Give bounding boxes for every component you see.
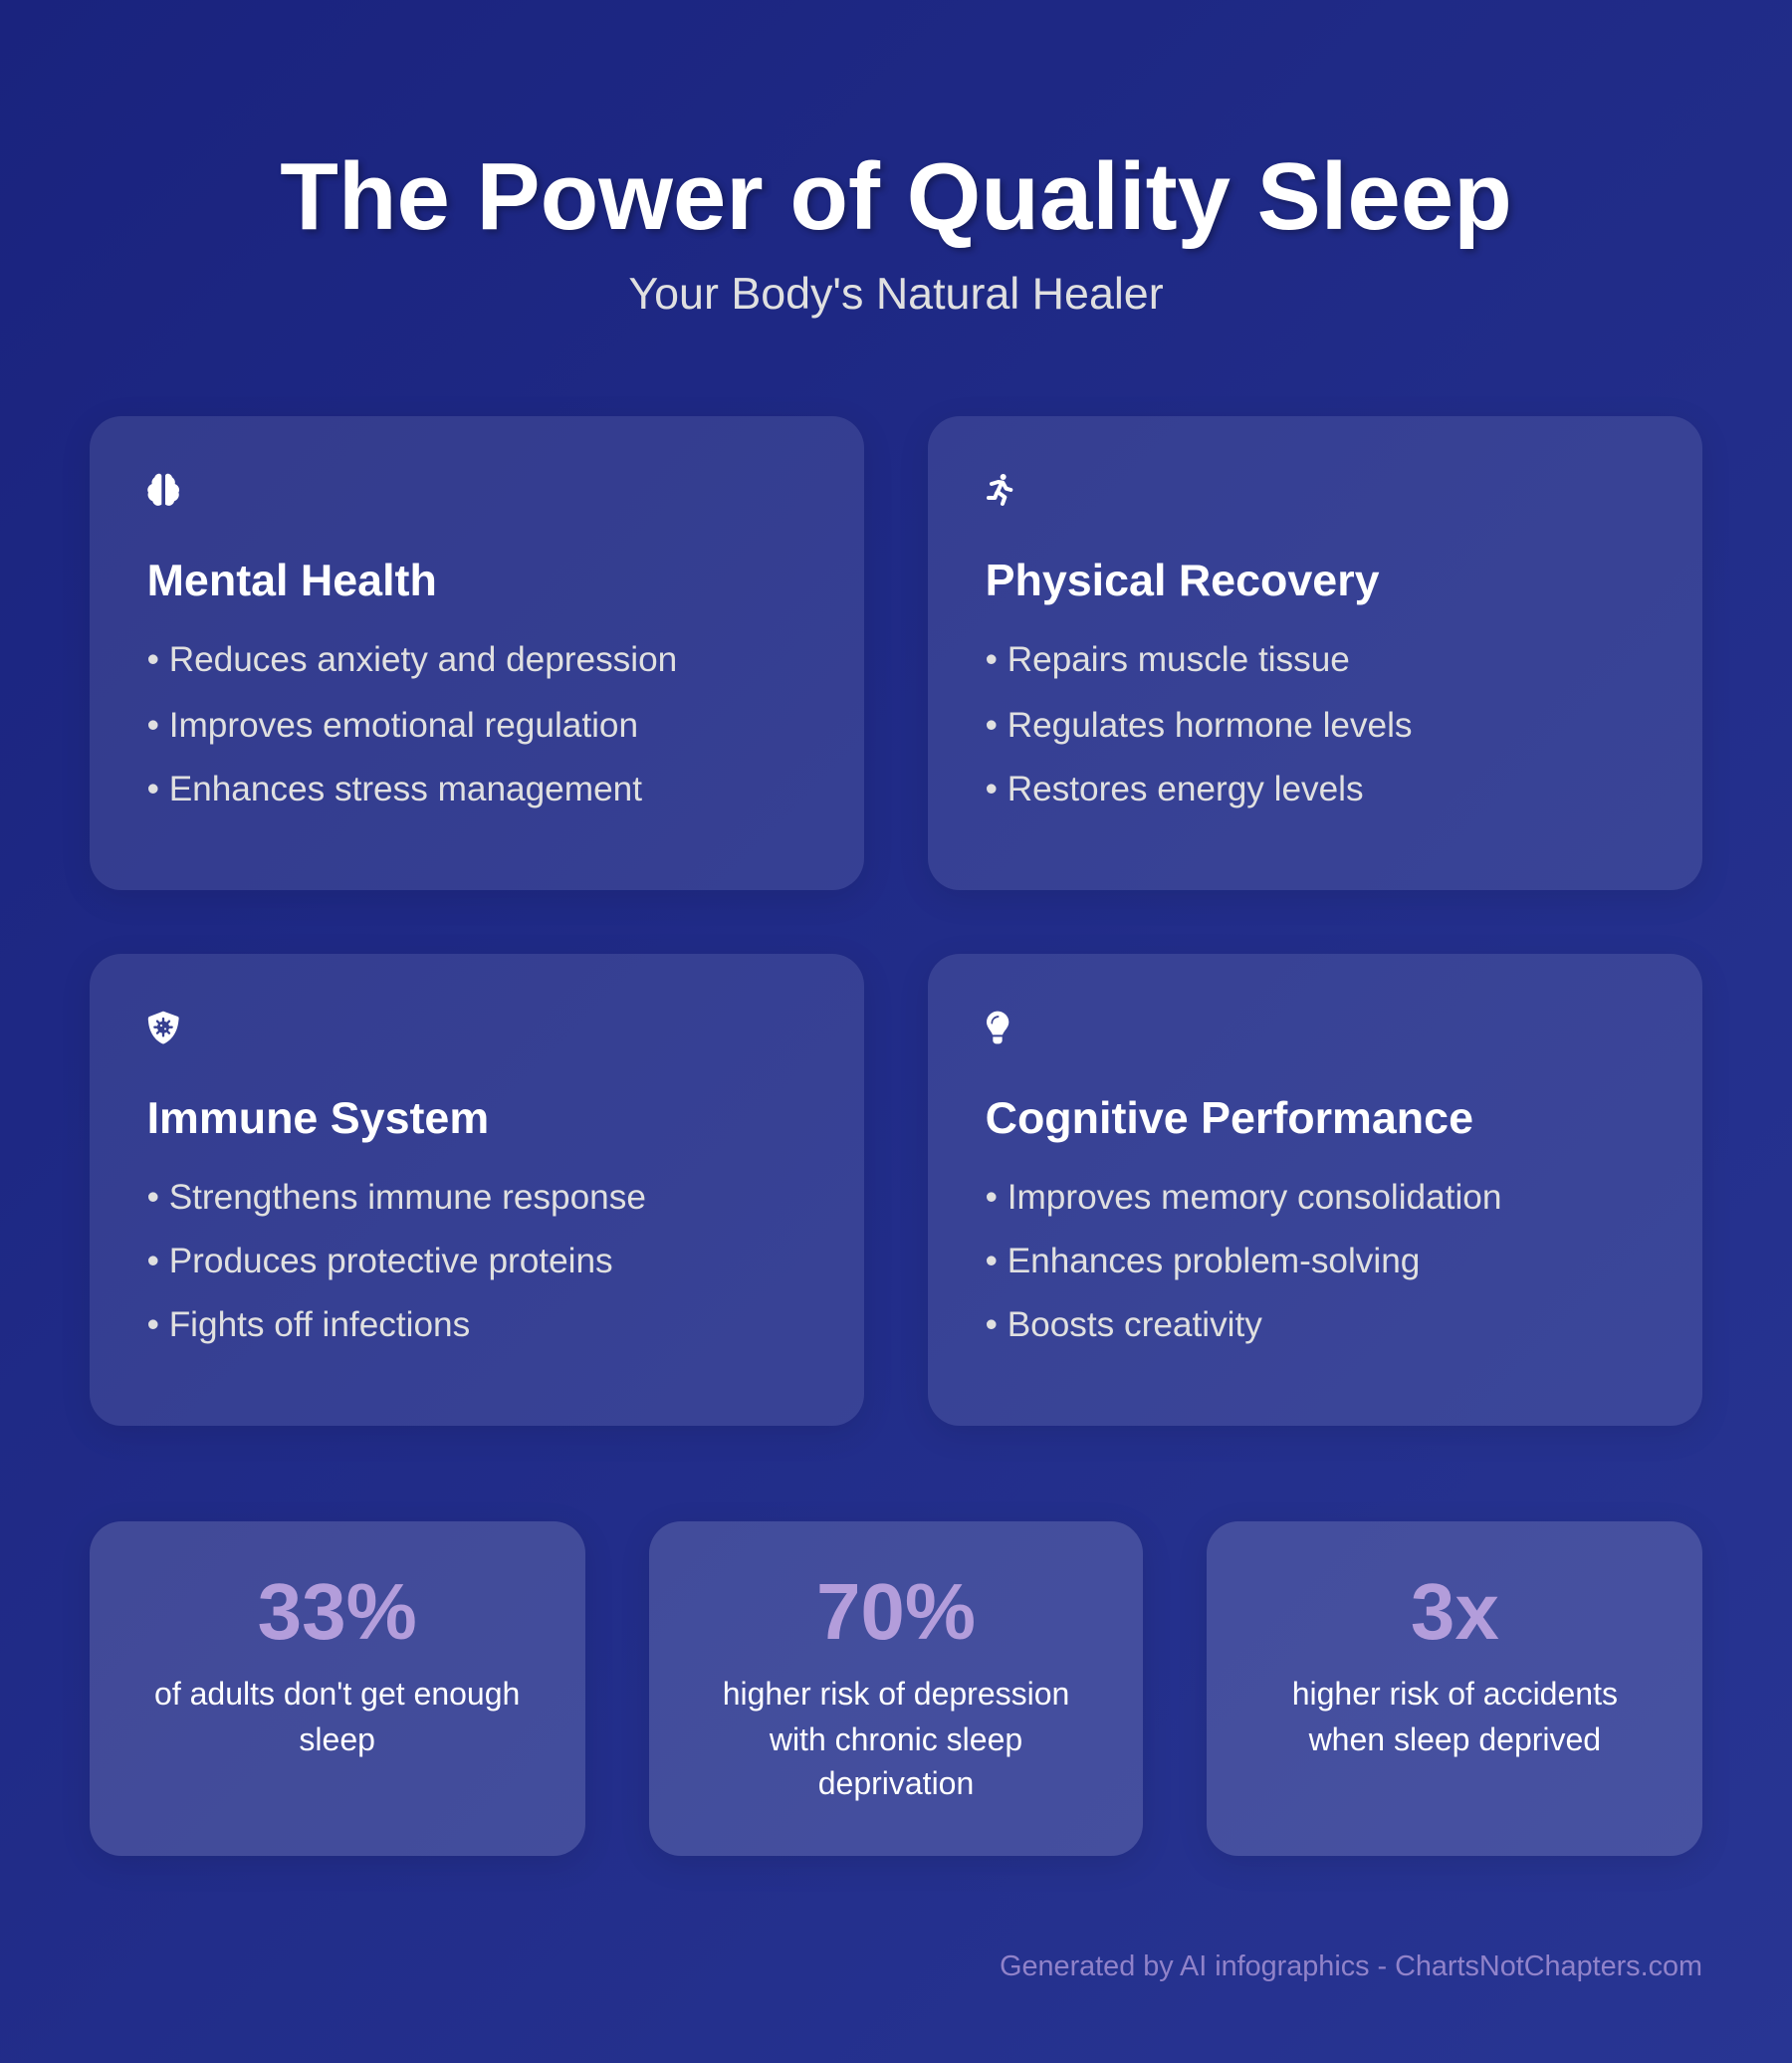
icon: lightbulb [987,1012,1009,1043]
list item: • Improves memory consolidation [986,1178,1501,1217]
panel: physical recovery [928,416,1702,890]
stat card: 70% [649,1521,1143,1856]
subtitle: Your Body's Natural Healer [628,269,1164,319]
stat label [1292,1676,1618,1757]
stat label: higher risk of depression [723,1676,1069,1712]
list item: • Strengthens immune response [147,1178,646,1217]
panel: cognitive performance [928,954,1702,1426]
stat label [723,1676,1069,1801]
panel: mental health [90,416,864,890]
footer credit: Generated by AI infographics - ChartsNotChapters.com [1000,1950,1702,1982]
list item: • Boosts creativity [986,1305,1262,1344]
panel: immune system [90,954,864,1426]
stat label: of adults don't get enough [154,1676,520,1712]
list item: • Restores energy levels [986,770,1364,808]
stat label: when sleep deprived [1309,1721,1601,1757]
stat label: deprivation [818,1765,974,1801]
stat label [154,1676,520,1757]
stat number: 70% [816,1567,976,1656]
stat label: higher risk of accidents [1292,1676,1618,1712]
icon: runner [987,474,1013,506]
list item: • Fights off infections [147,1305,470,1344]
heading: immune system: Immune System [147,1093,489,1143]
list item: • Produces protective proteins [147,1242,613,1280]
icon: brain [147,474,179,506]
stat number: 33% [258,1567,417,1656]
list item: • Reduces anxiety and depression [147,640,677,679]
list item: • Improves emotional regulation [147,706,638,745]
stat card: 33% [90,1521,585,1856]
list item: • Repairs muscle tissue [986,640,1350,679]
heading: mental health: Mental Health [147,556,437,605]
icon: shield with virus [147,1012,179,1043]
heading: physical recovery: Physical Recovery [986,556,1380,605]
title: The Power of Quality Sleep [280,143,1512,250]
list item: • Enhances stress management [147,770,642,808]
stat card: 3x [1207,1521,1702,1856]
stat label: sleep [299,1721,375,1757]
list item: • Regulates hormone levels [986,706,1413,745]
stat label: with chronic sleep [770,1721,1022,1757]
list item: • Enhances problem-solving [986,1242,1420,1280]
stat number: 3x [1411,1567,1499,1656]
heading: cognitive performance: Cognitive Performance [986,1093,1473,1143]
